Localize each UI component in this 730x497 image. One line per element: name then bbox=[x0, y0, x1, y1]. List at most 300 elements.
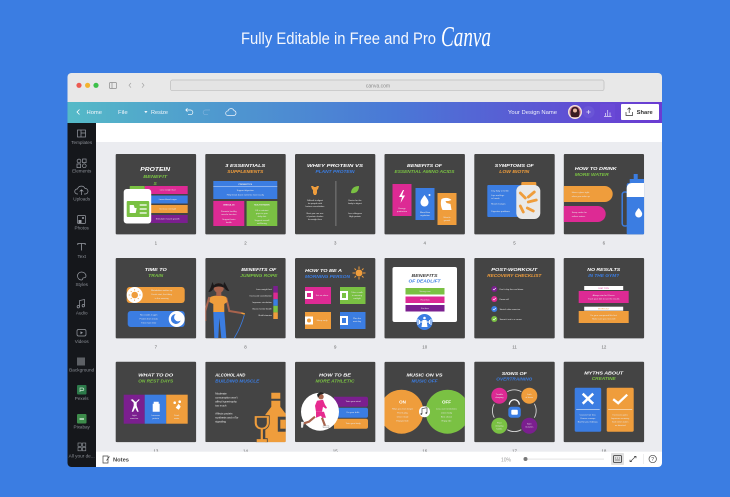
card 4 blue tile: digestion: regulation bbox=[420, 214, 431, 217]
page numbers: 10 bbox=[422, 344, 428, 350]
card 6 title: MORE WATER bbox=[575, 172, 609, 178]
view buttons: ? bbox=[651, 457, 654, 463]
card 5 title: LOW BIOTIN bbox=[499, 169, 530, 175]
card 17 green node: habits bbox=[496, 428, 503, 431]
card 7 night pill: Protein from meals bbox=[140, 318, 159, 320]
card 1 bars: Lose weight fast bbox=[160, 189, 176, 192]
card 16 title: MUSIC OFF bbox=[412, 379, 438, 385]
card 12 pink block: Always aim for 8 hours bbox=[593, 294, 616, 297]
card 17 orange node: of focus bbox=[525, 397, 534, 399]
card 10 benefit bars bbox=[406, 288, 444, 312]
card 17: signs of overtraining bbox=[474, 362, 555, 442]
page numbers: 15 bbox=[333, 448, 338, 454]
card 16 music off circle: Best choice bbox=[441, 416, 453, 419]
card 6 orange pill bbox=[564, 186, 613, 202]
card 1 title: BENEFIT bbox=[143, 174, 168, 180]
page numbers: 14 bbox=[243, 448, 248, 454]
card 17 pink node: Trouble bbox=[496, 393, 504, 396]
white canvas header strip bbox=[96, 123, 662, 142]
card 3 title bbox=[307, 164, 363, 173]
card 13: rest days bbox=[116, 362, 196, 442]
page numbers bbox=[153, 240, 607, 454]
card 16 music off circle: Listen body bbox=[441, 412, 453, 415]
editor toolbar bbox=[68, 102, 662, 123]
card 16 title bbox=[406, 373, 443, 385]
card 16 music on circle: Feel it play bbox=[397, 412, 409, 415]
browser title bar bbox=[68, 73, 662, 102]
card 15 tip bars: Train your mind bbox=[345, 400, 361, 403]
card 10 benefit bars: Fat loss bbox=[421, 307, 430, 310]
card 2 green panel: multivitamin bbox=[247, 201, 277, 226]
card 14 text: signaling bbox=[215, 420, 226, 424]
card 3 right text: Easier for the bbox=[348, 199, 362, 202]
page numbers: 1 bbox=[155, 240, 158, 246]
card 17 green node: sleeping bbox=[495, 426, 504, 428]
icon: cow bbox=[311, 186, 319, 195]
card 14 text: Affects protein bbox=[215, 412, 233, 416]
notes button bbox=[103, 456, 129, 463]
card 2 green panel: multivitamin: daily diet bbox=[258, 215, 267, 218]
card 7 morning pill: in the morning bbox=[155, 297, 169, 300]
editor toolbar: Your Design Name bbox=[508, 110, 557, 116]
sidebar: photos: Photos bbox=[75, 225, 90, 230]
card 15 title: MORE ATHLETIC bbox=[316, 379, 355, 385]
page numbers: 6 bbox=[603, 240, 606, 246]
card 17 pink node: sleeping bbox=[495, 397, 504, 399]
card 6 orange pill: Have a glass right bbox=[572, 191, 590, 194]
sidebar: all your designs bbox=[69, 443, 95, 458]
card 3 left text: for weight loss bbox=[308, 218, 323, 221]
card 2 title: 3 ESSENTIALS bbox=[225, 163, 266, 169]
view buttons bbox=[611, 453, 656, 465]
sidebar: videos: Videos bbox=[75, 339, 89, 344]
card 13 orange step bbox=[166, 395, 188, 424]
card 14 text: consumption won't bbox=[215, 396, 238, 400]
card 18 orange fact panel: as directed bbox=[615, 424, 626, 427]
card 14 text: too much bbox=[215, 404, 227, 408]
page numbers: 4 bbox=[423, 240, 426, 246]
card 10: benefits of deadlift bbox=[384, 258, 465, 338]
card 13 title bbox=[138, 373, 174, 385]
sidebar: background: Background bbox=[69, 368, 95, 372]
card 6 pink pill: Swap sodas for bbox=[572, 211, 587, 214]
card 13 orange step: water bbox=[174, 417, 180, 420]
card 15 title: HOW TO BE bbox=[319, 373, 352, 379]
icon: leaf bbox=[351, 186, 359, 193]
card 14 title: BUILDING MUSCLE bbox=[215, 379, 260, 385]
sidebar: videos bbox=[75, 330, 89, 344]
card 8 title: BENEFITS OF bbox=[241, 267, 277, 273]
card 9 title bbox=[305, 268, 350, 280]
card 7 title bbox=[145, 268, 167, 277]
card 15 title bbox=[316, 373, 355, 385]
illustration: girl jumping rope bbox=[205, 282, 245, 338]
card 18: creatine myths bbox=[564, 362, 644, 442]
card 2 blue panel: probiotics: PROBIOTICS bbox=[238, 184, 253, 186]
card 14 title: ALCOHOL AND bbox=[214, 373, 246, 379]
card 2 green panel: multivitamin: MULTIVITAMIN bbox=[254, 204, 270, 206]
card 2 pink panel: omega 3: health bbox=[226, 221, 233, 224]
editor toolbar: File bbox=[118, 110, 128, 116]
zoom controls: 10% bbox=[501, 457, 512, 463]
card 4 blue tile: digestion bbox=[416, 188, 434, 220]
card 18 blue myth panel: Causes cramps bbox=[580, 417, 596, 420]
card 2 blue panel: probiotics: Help break down nutrients more easily bbox=[227, 194, 265, 196]
card 2 green panel: multivitamin: gaps in your bbox=[256, 212, 268, 215]
canvas workspace bbox=[96, 142, 662, 454]
icon: kettlebell bbox=[508, 400, 521, 418]
illustration: lunging athlete bbox=[301, 392, 339, 431]
card 3 right text: Less allergens bbox=[348, 212, 363, 215]
card 18 orange fact panel: Safe when taken bbox=[612, 421, 629, 424]
sidebar: text: Text bbox=[77, 254, 87, 259]
card 18 title bbox=[584, 371, 624, 382]
card 10 benefit bars: Heat flow bbox=[420, 298, 430, 302]
card 7 night pill: No crowds in gym bbox=[140, 314, 158, 316]
card 14 text: synthesis and mTor bbox=[215, 416, 239, 420]
card 13 title: ON REST DAYS bbox=[138, 379, 174, 385]
card 13 title: WHAT TO DO bbox=[138, 373, 173, 379]
card 3 right text bbox=[348, 200, 362, 218]
card 8: jumping rope bbox=[205, 258, 286, 338]
card 4 title: BENEFITS OF bbox=[407, 163, 443, 169]
card 1: protein benefits bbox=[116, 154, 196, 234]
card 11 title: RECOVERY CHECKLIST bbox=[487, 273, 542, 279]
card 3 left text bbox=[306, 199, 325, 221]
card 11 title bbox=[487, 267, 542, 279]
card 4 orange tile: muscle: Muscle bbox=[444, 217, 451, 219]
card 5 symptom list panel: Lips and legs bbox=[491, 195, 505, 197]
card 3: whey vs plant protein bbox=[295, 154, 375, 234]
zoom controls bbox=[501, 457, 604, 463]
bottom status bar bbox=[96, 452, 662, 467]
page numbers: 2 bbox=[244, 240, 247, 246]
card 15: more athletic bbox=[295, 362, 375, 442]
card 15 tip bars: Train your body bbox=[345, 422, 361, 425]
sidebar: background bbox=[69, 358, 95, 372]
browser window bbox=[68, 73, 662, 467]
card 9 blue tile bbox=[340, 312, 366, 329]
sidebar: styles: Styles bbox=[75, 282, 89, 287]
page numbers: 8 bbox=[244, 344, 247, 350]
card 7: time to train bbox=[116, 258, 196, 338]
card 18 title: CREATINE bbox=[592, 376, 616, 382]
card 8 colour scale bbox=[273, 286, 278, 319]
icon: supplement jar bbox=[516, 182, 540, 219]
sidebar: elements bbox=[72, 159, 92, 173]
card 16 music on circle bbox=[380, 390, 424, 434]
card 9 blue tile: Plan the bbox=[353, 317, 362, 320]
card 17 title: OVERTRAINING bbox=[496, 377, 532, 383]
card 5 title: SYMPTOMS OF bbox=[495, 163, 535, 169]
card 13 purple step: Light bbox=[132, 414, 137, 417]
card 3 left text: Difficult to digest bbox=[307, 199, 323, 202]
card 18 orange fact panel: Improves recovery bbox=[611, 417, 630, 420]
card 11 title: POST-WORKOUT bbox=[491, 267, 538, 273]
card 2 green panel: multivitamin: Support overall bbox=[255, 219, 270, 222]
icon: protein tub bbox=[124, 186, 151, 224]
sidebar: templates: Templates bbox=[71, 140, 93, 145]
card 14 text: affect hypertrophy bbox=[215, 400, 237, 404]
card 3 left text: of protein shakes bbox=[307, 215, 324, 218]
card 17 purple node bbox=[521, 418, 537, 434]
card 18 orange fact panel bbox=[607, 388, 634, 432]
card 14 title bbox=[214, 373, 260, 385]
icon: music notes bbox=[419, 406, 430, 417]
sidebar: uploads bbox=[73, 186, 91, 202]
notes button: Notes bbox=[113, 457, 129, 463]
icon: deadlift badge bbox=[416, 314, 432, 330]
card 16 music on circle: Drive it loud bbox=[397, 416, 409, 419]
card 5 symptom list panel: Dry, flaky or brittle bbox=[491, 190, 510, 192]
page numbers: 12 bbox=[601, 344, 607, 350]
card 6: drink more water bbox=[564, 154, 645, 235]
card 14 text bbox=[215, 392, 239, 424]
card 9 pink tile: Set an alarm bbox=[316, 294, 328, 297]
card 4 pink tile: energy bbox=[392, 184, 412, 216]
card 8 benefit labels: Build stamina bbox=[259, 314, 273, 317]
card 17 title bbox=[496, 371, 532, 383]
card 15 tip bars: Do your drills bbox=[347, 411, 360, 414]
card 18 blue myth panel: Bad for your kidneys bbox=[578, 421, 599, 424]
card 9 green tile bbox=[340, 287, 366, 304]
card 11 checklist: Stretch after exercise bbox=[500, 308, 521, 311]
card 17 green node bbox=[491, 418, 507, 434]
headline bbox=[241, 22, 491, 53]
card 2 blue panel: probiotics bbox=[213, 181, 277, 199]
editor toolbar: Resize bbox=[151, 110, 168, 116]
card 17 green node: Poor bbox=[497, 422, 502, 425]
card 11 checklist: Sweat it out in a sauna bbox=[500, 318, 523, 321]
card 1 title: S bbox=[154, 181, 158, 187]
card 6 pink pill bbox=[564, 206, 606, 222]
card 1 title bbox=[140, 167, 170, 185]
card 2 pink panel: omega 3: Promote healthy bbox=[221, 210, 238, 213]
card 2 blue panel: probiotics: Support digestion bbox=[237, 189, 255, 192]
card 9 orange tile: Sleep early bbox=[317, 319, 328, 322]
card 1 bars bbox=[145, 186, 188, 223]
card 17 orange node: Lack bbox=[527, 394, 533, 396]
card 6 orange pill: when you wake up bbox=[572, 196, 591, 198]
sidebar: photos bbox=[75, 216, 90, 230]
card 5 symptom list panel: in hands bbox=[491, 198, 500, 200]
card 2 pink panel: omega 3: Support brain bbox=[222, 218, 236, 221]
card 4 pink tile: energy: Energy bbox=[399, 207, 406, 210]
card 3 left text: for people with bbox=[308, 202, 323, 205]
card 16: music on vs off bbox=[380, 362, 470, 442]
card 16 music off circle: Enjoy ride bbox=[442, 420, 452, 423]
card 8 title bbox=[240, 267, 278, 279]
page numbers: 17 bbox=[512, 448, 517, 454]
card 2: 3 essentials supplements bbox=[205, 154, 286, 234]
card 12 orange block: Make sure you rest well bbox=[592, 318, 616, 320]
card 2 pink panel: omega 3: muscle function bbox=[221, 213, 237, 216]
card 2 pink panel: omega 3 bbox=[213, 201, 244, 226]
card 9 title: HOW TO BE A bbox=[305, 268, 343, 274]
card 5 symptom list panel: Digestive problems bbox=[491, 210, 511, 213]
card 5 symptom list panel bbox=[487, 185, 523, 217]
sidebar: pexels: Pexels bbox=[75, 396, 89, 401]
card 2 green panel: multivitamin: Fill in nutrient bbox=[255, 209, 269, 212]
card 3 divider bbox=[336, 181, 337, 226]
card 3 title: WHEY PROTEIN VS bbox=[307, 163, 364, 169]
editor toolbar: Home bbox=[86, 110, 102, 116]
card 8 benefit labels: Boost mental health bbox=[252, 308, 273, 311]
card 2 title: SUPPLEMENTS bbox=[227, 169, 264, 175]
card 12 orange block: Do your compound lifts first bbox=[590, 314, 617, 317]
card 7 title: TRAIN bbox=[148, 273, 164, 279]
card 9 blue tile: next day bbox=[353, 320, 362, 323]
card 18 orange fact panel: Increases gains bbox=[613, 414, 629, 417]
card 8 benefit labels: Increased coordination bbox=[250, 294, 273, 297]
card 1 bars: Lower blood sugar bbox=[159, 198, 177, 201]
sidebar: audio: Audio bbox=[76, 310, 88, 316]
card 12 pink block: Track your diet to see the results bbox=[588, 298, 620, 300]
sidebar: audio bbox=[76, 300, 88, 316]
card 9 green tile: in morning bbox=[352, 294, 363, 297]
card 11 checklist bbox=[491, 286, 524, 322]
card 10 title: OF DEADLIFT bbox=[408, 278, 441, 284]
card 7 morning pill: Metabolism wakes up bbox=[151, 289, 173, 292]
card 17 title: SIGNS OF bbox=[502, 371, 528, 377]
card 12 pink block bbox=[579, 286, 629, 303]
card 12 title bbox=[587, 267, 621, 279]
card 3 left text: Best you can use bbox=[307, 212, 324, 215]
card 2 pink panel: omega 3: OMEGA-3S bbox=[223, 204, 235, 206]
card 1 title: PROTEIN bbox=[140, 167, 171, 173]
card 6 title bbox=[574, 167, 617, 176]
card 14 text: Moderate bbox=[215, 392, 227, 396]
page numbers: 3 bbox=[334, 240, 337, 246]
page numbers: 18 bbox=[601, 448, 607, 454]
sidebar: pixabay: Pixabay bbox=[74, 424, 91, 430]
sidebar: styles bbox=[75, 272, 89, 287]
illustration: bottle and glass bbox=[254, 393, 286, 443]
card 8 benefit labels bbox=[250, 288, 273, 317]
card 10 title bbox=[408, 273, 441, 284]
card 18 blue myth panel bbox=[575, 388, 601, 432]
card 18 blue myth panel: Causes hair loss bbox=[580, 414, 597, 417]
card 17 purple node: Sore bbox=[527, 423, 532, 426]
card 16 music off circle: Less user restrictions bbox=[436, 408, 458, 411]
card 6 pink pill: seltzer waters bbox=[572, 215, 586, 218]
card 16 music on circle: Enjoyed ride bbox=[396, 420, 409, 423]
page numbers: 7 bbox=[155, 344, 158, 350]
card 7 night pill bbox=[128, 311, 185, 327]
card 7 morning pill: Fresh start, first thing bbox=[151, 293, 173, 296]
card 14: alcohol and muscle bbox=[205, 362, 286, 443]
card 4 orange tile: muscle: growth bbox=[444, 219, 451, 222]
card 12 orange block bbox=[579, 307, 629, 323]
card 13 blue step bbox=[145, 395, 166, 424]
card 13 blue step: protein bbox=[152, 417, 160, 420]
sidebar: uploads: Uploads bbox=[73, 197, 91, 202]
icon: water bottle bbox=[622, 174, 645, 235]
card 17 pink node bbox=[491, 388, 507, 404]
page numbers: 9 bbox=[334, 344, 337, 350]
card 16 music off circle bbox=[426, 390, 470, 434]
card 10 white panel bbox=[392, 267, 457, 322]
sidebar: elements: Elements bbox=[72, 168, 92, 173]
card 3 left text: lactose sensitivities bbox=[306, 205, 325, 208]
card 10 benefit bars: Strong core bbox=[419, 290, 431, 293]
card 12 pink block: DIET TIPS bbox=[599, 288, 609, 290]
card 9: morning person bbox=[295, 258, 375, 338]
card 15 tip bars bbox=[334, 397, 368, 429]
page numbers: 11 bbox=[512, 344, 517, 350]
card 4 orange tile: muscle bbox=[438, 193, 456, 225]
card 8 title: JUMPING ROPE bbox=[240, 273, 278, 279]
card 16 title: MUSIC ON VS bbox=[406, 373, 443, 379]
card 12: no results in the gym bbox=[564, 258, 644, 338]
card 3 title: PLANT PROTEIN bbox=[316, 169, 355, 175]
card 2 green panel: multivitamin: well-being bbox=[257, 223, 268, 225]
card 11 checklist: Foam roll bbox=[500, 298, 509, 301]
card 10 title: BENEFITS bbox=[412, 273, 438, 279]
page numbers: 16 bbox=[422, 448, 428, 454]
card 16 music on circle: Helps you train longer bbox=[392, 408, 413, 411]
card 4 title: ESSENTIAL AMINO ACIDS bbox=[394, 169, 455, 175]
card 16 music on circle: ON bbox=[399, 400, 406, 405]
card 9 title: MORNING PERSON bbox=[305, 274, 350, 280]
card 18 title: MYTHS ABOUT bbox=[584, 371, 624, 377]
card 5 symptom list panel: Mood changes bbox=[491, 204, 507, 206]
card 8 benefit labels: Lose weight fast bbox=[256, 288, 272, 291]
browser title bar: canva.com bbox=[366, 83, 390, 89]
card 13 purple step: exercise bbox=[130, 417, 139, 420]
card 9 green tile: Take a walk bbox=[351, 292, 364, 294]
card 9 green tile: sunlight bbox=[353, 297, 361, 300]
card 12 title: IN THE GYM? bbox=[588, 273, 619, 279]
card 17 cycle arrows bbox=[492, 390, 536, 432]
card 4: essential amino acids bbox=[384, 154, 465, 234]
card 1 bars: Stimulate muscle growth bbox=[156, 218, 180, 221]
card 13 blue step: Increase bbox=[152, 414, 161, 417]
card 2 title bbox=[225, 164, 266, 173]
card 3 right text: High protein bbox=[349, 215, 362, 218]
sidebar: text bbox=[77, 244, 87, 259]
card 8 benefit labels: Improves circulation bbox=[252, 301, 273, 304]
card 6 title: HOW TO DRINK bbox=[575, 166, 617, 172]
card 11: post-workout checklist bbox=[474, 258, 555, 338]
sidebar: templates bbox=[71, 130, 93, 145]
page numbers: 13 bbox=[153, 448, 159, 454]
left sidebar bbox=[68, 123, 96, 467]
card 7 night pill: Time more time bbox=[141, 322, 157, 324]
card 4 blue tile: digestion: Blood flow bbox=[420, 212, 430, 214]
page numbers: 5 bbox=[513, 240, 516, 246]
sidebar: pexels bbox=[75, 385, 89, 401]
card 4 pink tile: energy: production bbox=[397, 210, 408, 213]
card 7 morning pill bbox=[127, 287, 185, 303]
card 17 purple node: muscles bbox=[525, 427, 534, 429]
card 1 bars: Increase strength bbox=[159, 208, 177, 211]
sidebar: pixabay bbox=[74, 414, 91, 430]
card 3 right text: body to digest bbox=[348, 202, 362, 205]
card 16 music off circle: OFF bbox=[442, 400, 451, 405]
card 5 title bbox=[494, 164, 534, 173]
icon: sun bbox=[352, 266, 366, 280]
card 4 title bbox=[394, 164, 454, 173]
card 13 purple step bbox=[124, 395, 145, 424]
editor toolbar: Share bbox=[637, 110, 653, 116]
card 5: low biotin symptoms bbox=[474, 154, 555, 234]
sidebar: all your designs: All your de... bbox=[69, 454, 95, 458]
headline: Fully Editable in Free and Pro bbox=[241, 30, 436, 48]
card 12 title: NO RESULTS bbox=[587, 267, 621, 273]
card 11 checklist: Don't skip the cool down bbox=[500, 288, 524, 291]
card 13 orange step: Drink bbox=[174, 414, 180, 417]
